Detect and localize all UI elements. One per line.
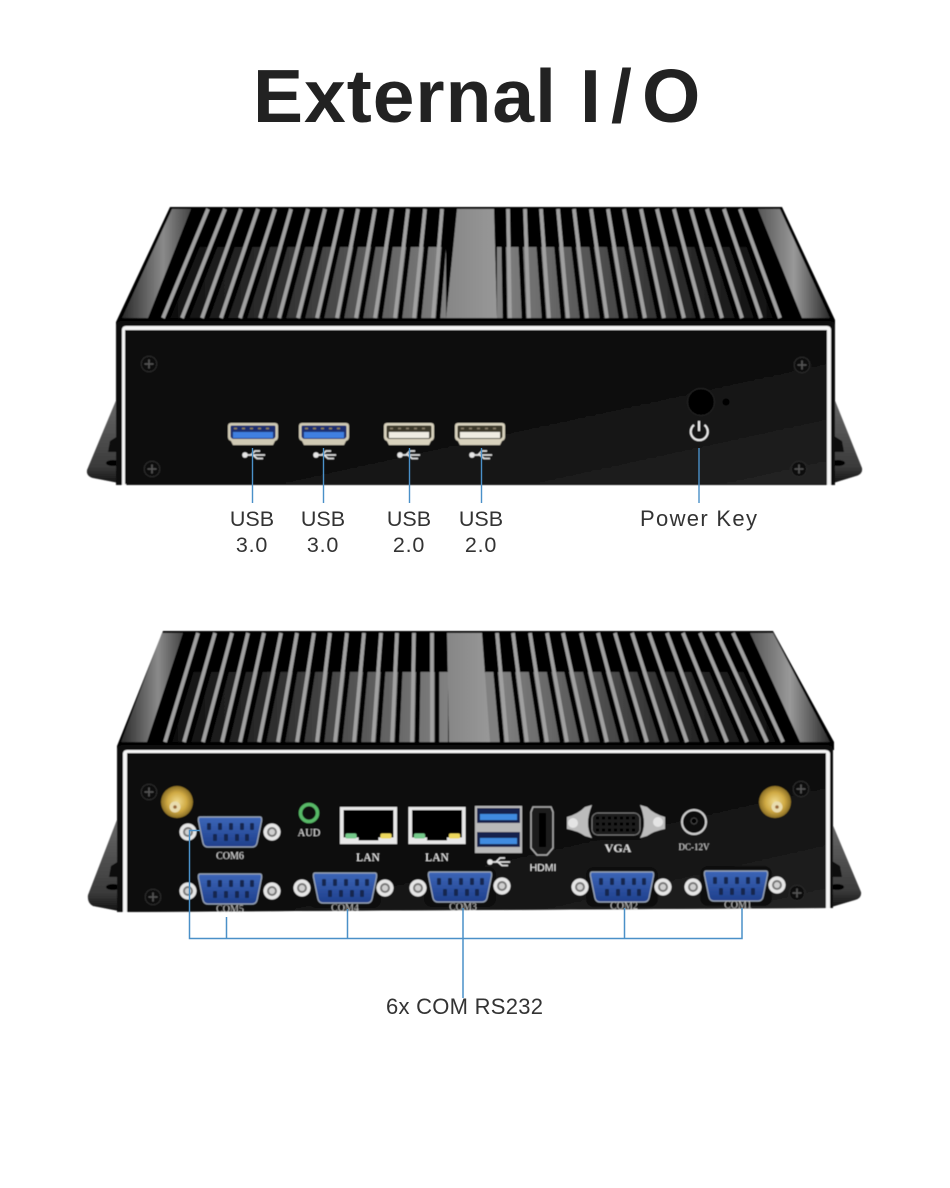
port: COM4: COM4: [331, 903, 359, 914]
label: USB 2.0 fourth: USB: [459, 507, 503, 531]
label: USB 3.0 second: 3.0: [307, 533, 339, 557]
port: COM5: [180, 869, 280, 915]
label: USB 3.0 second: USB: [301, 507, 345, 531]
leader lines: COM ports bracket: [190, 830, 742, 998]
port: HDMI: HDMI: [530, 862, 556, 874]
title: O: [642, 54, 700, 138]
leader lines: front view: [252, 448, 699, 503]
title: /: [611, 54, 632, 138]
port: USB 2.0 third: [384, 423, 434, 458]
port: COM6: COM6: [216, 851, 244, 862]
port: USB 3.0 second: [299, 423, 349, 458]
device: rear view: [88, 631, 861, 915]
antenna connector: right: [759, 786, 791, 818]
port: COM2: COM2: [610, 901, 638, 912]
label: USB 3.0 left: USB: [230, 507, 274, 531]
port: stacked USB 3.0: [475, 806, 522, 866]
label: USB 2.0 third: USB: [387, 507, 431, 531]
antenna connector: left: [161, 786, 193, 818]
label: USB 2.0 fourth: 2.0: [465, 533, 497, 557]
port: COM4: [294, 868, 394, 914]
icon: power symbol: [691, 421, 708, 440]
port: VGA: [567, 805, 665, 855]
screws: rear panel: [140, 780, 810, 906]
title: I: [580, 54, 601, 138]
label: 6x COM RS232: 6x COM RS232: [386, 994, 543, 1019]
port: COM3: [410, 867, 510, 913]
port: LAN 1: LAN: [356, 852, 381, 864]
port: LAN 1: [340, 807, 397, 864]
screws: front panel: [140, 356, 810, 478]
mounting foot: front left: [87, 398, 124, 484]
heatsink: rear view: [117, 631, 834, 750]
port: DC power: DC-12V: [678, 842, 710, 852]
port: USB 3.0 left: [228, 423, 278, 458]
mounting foot: front right: [830, 398, 862, 484]
port: COM1: COM1: [724, 900, 752, 911]
port: COM3: COM3: [449, 902, 477, 913]
title: External: [253, 54, 579, 138]
port: DC power: [678, 810, 710, 852]
port: audio: [298, 804, 321, 839]
port: COM6: [180, 812, 280, 862]
port: LAN 2: LAN: [425, 852, 450, 864]
label: USB 2.0 third: 2.0: [393, 533, 425, 557]
port: COM1: [684, 866, 786, 911]
heatsink: front view: [116, 207, 835, 326]
mounting foot: rear right: [828, 823, 861, 908]
port: HDMI: [530, 807, 556, 874]
port: audio: AUD: [298, 828, 321, 839]
label: USB 3.0 left: 3.0: [236, 533, 268, 557]
port: LAN 2: [408, 807, 466, 864]
mounting foot: rear left: [88, 817, 124, 912]
port: USB 2.0 fourth: [455, 423, 505, 458]
port: COM2: [572, 867, 672, 912]
power button and LED: [688, 388, 730, 416]
rear panel: [117, 745, 833, 912]
port: COM5: COM5: [216, 904, 244, 915]
label: Power Key: Power Key: [640, 506, 757, 531]
front panel: front view: [116, 321, 835, 485]
device: front view: [87, 207, 862, 485]
port: VGA: VGA: [605, 841, 632, 855]
